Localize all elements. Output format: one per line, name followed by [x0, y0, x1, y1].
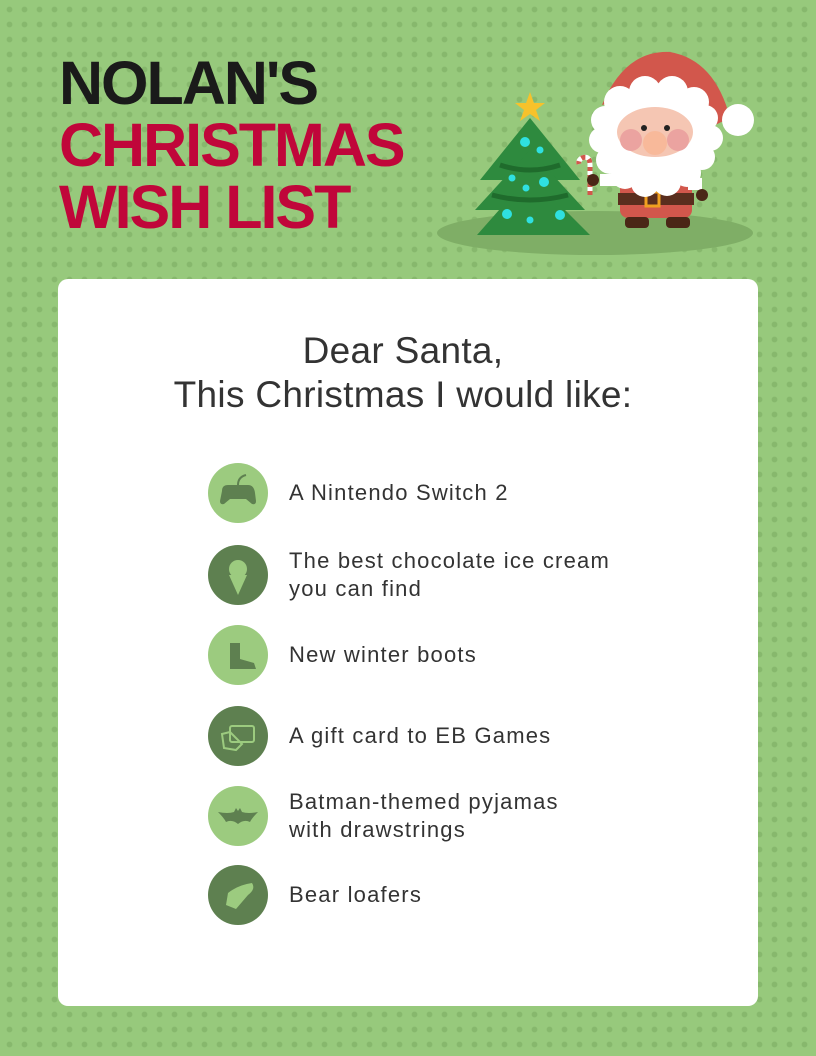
title: [59, 49, 404, 241]
item: ice cream: you can find: [289, 576, 422, 601]
icon: santa: [579, 52, 754, 228]
panel: wish list card: [58, 279, 758, 1006]
item: gift card: [208, 706, 551, 766]
item: bear loafers: [208, 865, 422, 925]
item: batman pyjamas: with drawstrings: [289, 817, 466, 842]
item: boots: [208, 625, 477, 685]
item: boots: New winter boots: [289, 642, 477, 667]
title: NOLAN'S: [59, 49, 317, 117]
item: batman pyjamas: Batman-themed pyjamas: [289, 789, 559, 814]
item: nintendo switch: [208, 463, 509, 523]
icon: christmas tree: [475, 92, 590, 235]
item: batman pyjamas: [208, 786, 559, 846]
greeting heading: [174, 330, 632, 415]
illustration: tree and santa: [437, 52, 754, 255]
item: gift card: A gift card to EB Games: [289, 723, 551, 748]
title: CHRISTMAS: [59, 111, 404, 179]
greeting heading: Dear Santa,: [303, 330, 503, 371]
greeting heading: This Christmas I would like:: [174, 374, 632, 415]
item: bear loafers: Bear loafers: [289, 882, 422, 907]
item: nintendo switch: A Nintendo Switch 2: [289, 480, 509, 505]
title: WISH LIST: [59, 173, 349, 241]
item: ice cream: The best chocolate ice cream: [289, 548, 610, 573]
ground shadow: [437, 211, 753, 255]
item: ice cream: [208, 545, 610, 605]
